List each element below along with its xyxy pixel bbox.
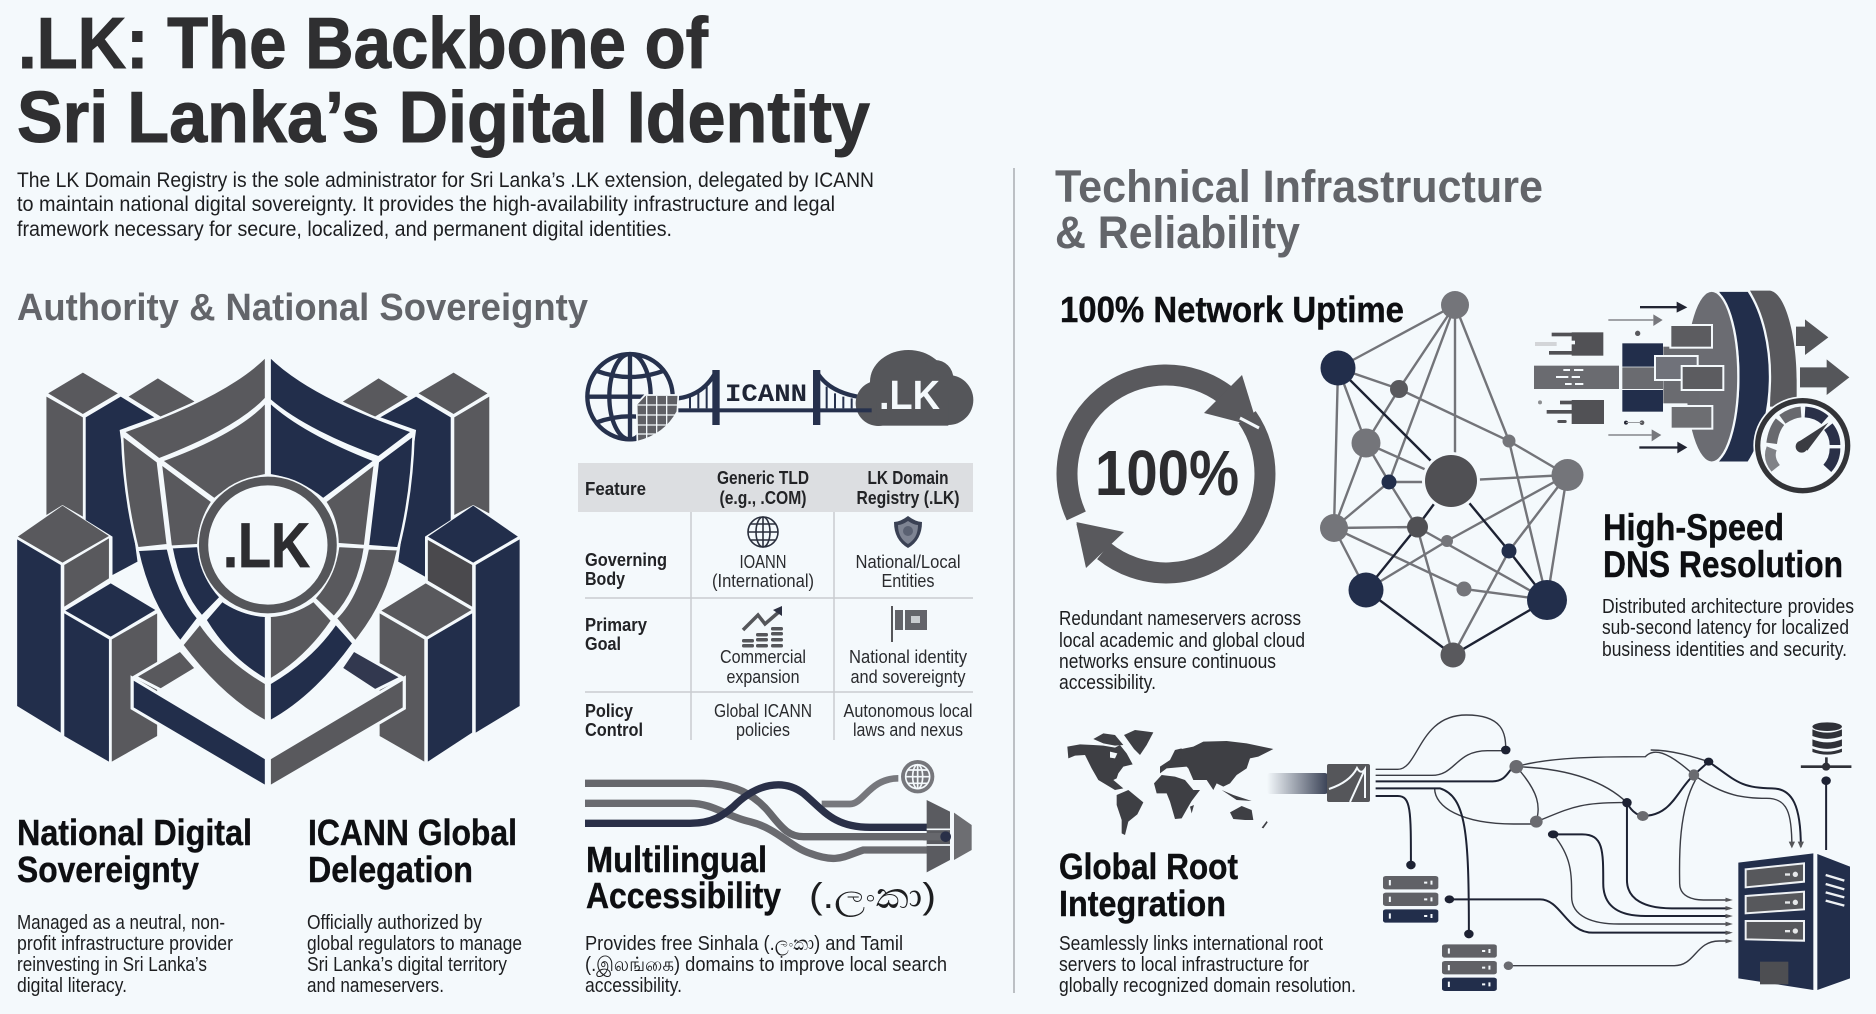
text: redundant nameservers [1059, 608, 1305, 694]
icon: table globe [748, 517, 778, 547]
block: multilingual accessibility: (.ලංකා) [809, 875, 936, 918]
row: policy control: Policy [585, 701, 633, 721]
block: national digital sovereignty: profit infrastructure provider [17, 933, 233, 955]
table header: Generic TLD [717, 468, 809, 488]
text: redundant nameservers: Redundant nameservers across [1059, 608, 1301, 630]
block: high-speed dns resolution: DNS Resolution [1603, 544, 1843, 585]
block: national digital sovereignty: reinvesting in Sri Lanka’s [17, 954, 207, 976]
block: icann global delegation: Officially authorized by [307, 912, 482, 934]
title: Sri Lanka’s Digital Identity [17, 78, 870, 158]
heading: technical infrastructure and reliability: Technical Infrastructure [1055, 161, 1543, 212]
text: redundant nameservers: networks ensure continuous [1059, 651, 1276, 673]
icon: circular uptime arrows with 100% [1066, 375, 1265, 573]
intro paragraph [17, 169, 874, 241]
block: national digital sovereignty [17, 812, 252, 997]
row: governing body: National/Local [856, 552, 960, 572]
row: policy control: Global ICANN [714, 701, 812, 721]
illustration: dns speed disc and gauge [1534, 291, 1852, 495]
illustration: icann bridge from globe to .lk cloud [587, 350, 973, 442]
block: icann global delegation: ICANN Global [308, 812, 517, 853]
block: multilingual accessibility: accessibility. [585, 975, 682, 997]
block: icann global delegation: Sri Lanka’s digital territory [307, 954, 507, 976]
illustration: cable from world map into junction [1267, 764, 1370, 802]
comparison table [578, 463, 973, 740]
heading: technical infrastructure and reliability [1055, 161, 1543, 258]
block: multilingual accessibility: Multilingual [586, 839, 767, 880]
block: icann global delegation: Delegation [308, 849, 473, 890]
icon: database with network bar [1801, 722, 1851, 771]
row: primary goal: and sovereignty [850, 667, 966, 687]
text: redundant nameservers: accessibility. [1059, 672, 1156, 694]
table header: Feature [585, 479, 646, 499]
block: global root integration [1059, 846, 1356, 997]
row: primary goal: Commercial [720, 647, 806, 667]
illustration: shield over isometric towers [17, 356, 520, 787]
block: global root integration: globally recognized domain resolution. [1059, 975, 1356, 997]
block: high-speed dns resolution: High-Speed [1603, 507, 1784, 548]
row: governing body: IOANN [740, 552, 786, 572]
table header [578, 463, 973, 512]
row: policy control: Autonomous local [844, 701, 972, 721]
icon: main server tower [1738, 853, 1850, 990]
row: governing body [585, 550, 960, 591]
icon: circular uptime arrows with 100%: 100% [1095, 437, 1239, 509]
row: primary goal: Goal [585, 634, 621, 654]
row: policy control: Control [585, 720, 643, 740]
block: icann global delegation: and nameservers. [307, 975, 444, 997]
title [17, 4, 870, 158]
icon: table shield [894, 516, 922, 548]
block: national digital sovereignty: Sovereignty [17, 849, 199, 890]
heading: 100% network uptime: 100% Network Uptime [1060, 289, 1404, 330]
row: policy control [585, 701, 972, 740]
block: multilingual accessibility: (.இலங்கை) domains to improve local search [585, 954, 947, 977]
illustration: shield over isometric towers: .LK [223, 511, 310, 581]
row: primary goal: National identity [849, 647, 967, 667]
icon: server rack stack two [1442, 944, 1497, 991]
diagram: root server routing lines [1376, 715, 1831, 970]
block: global root integration: Integration [1059, 883, 1226, 924]
block: icann global delegation [307, 812, 522, 997]
table header: Registry (.LK) [856, 488, 960, 508]
intro paragraph: The LK Domain Registry is the sole administrator for Sri Lanka’s .LK extension, delegated by ICANN [17, 169, 874, 192]
table header: LK Domain [868, 468, 948, 488]
block: multilingual accessibility: Provides free Sinhala (.ලංකා) and Tamil [585, 933, 903, 956]
illustration: world map [1067, 730, 1273, 835]
illustration: icann bridge from globe to .lk cloud: .LK [879, 372, 940, 418]
title: .LK: The Backbone of [18, 4, 709, 84]
row: governing body: Body [585, 569, 625, 589]
heading: technical infrastructure and reliability: & Reliability [1055, 207, 1300, 258]
block: global root integration: Global Root [1059, 846, 1238, 887]
row: governing body: (International) [712, 571, 814, 591]
illustration: icann bridge from globe to .lk cloud: ICANN [725, 380, 807, 409]
table header: (e.g., .COM) [720, 488, 806, 508]
row: governing body: Governing [585, 550, 667, 570]
block: global root integration: Seamlessly links international root [1059, 933, 1323, 955]
icon: national flag [891, 606, 927, 642]
block: global root integration: servers to local infrastructure for [1059, 954, 1309, 976]
block: national digital sovereignty: National Digital [17, 812, 252, 853]
block: multilingual accessibility: Accessibility [586, 875, 781, 916]
text: redundant nameservers: local academic and global cloud [1059, 630, 1305, 652]
row: primary goal: Primary [585, 615, 647, 635]
heading: authority and national sovereignty: Authority & National Sovereignty [17, 287, 588, 329]
icon: growth chart and coins [742, 606, 783, 648]
chart: mesh network graph [1320, 291, 1584, 668]
block: high-speed dns resolution: business identities and security. [1602, 639, 1847, 661]
block: high-speed dns resolution [1602, 507, 1854, 661]
block: multilingual accessibility [585, 839, 947, 997]
block: icann global delegation: global regulators to manage [307, 933, 522, 955]
row: governing body: Entities [882, 571, 934, 591]
block: national digital sovereignty: Managed as a neutral, non- [17, 912, 225, 934]
intro paragraph: to maintain national digital sovereignty. It provides the high-availability infrastructure and legal [17, 193, 835, 216]
illustration: multilingual cables converging [585, 760, 972, 872]
row: policy control: laws and nexus [853, 720, 963, 740]
row: primary goal: expansion [726, 667, 800, 687]
icon: server rack stack one [1383, 876, 1438, 923]
section divider [1013, 168, 1015, 993]
row: primary goal [585, 615, 967, 687]
intro paragraph: framework necessary for secure, localized, and permanent digital identities. [17, 218, 672, 241]
block: national digital sovereignty: digital literacy. [17, 975, 127, 997]
row: policy control: policies [736, 720, 790, 740]
